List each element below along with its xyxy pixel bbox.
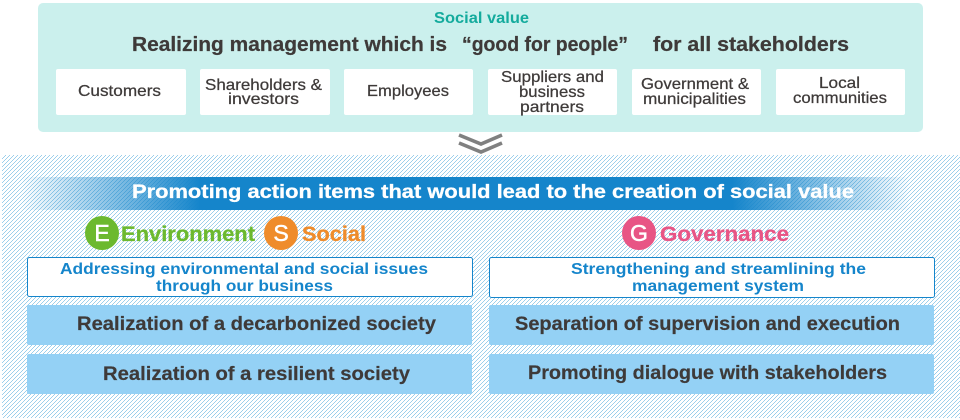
stakeholder: local communities: Local [819, 75, 860, 92]
stakeholder: government and municipalities [632, 69, 761, 115]
item: decarbonized society: Realization of a decarbonized society [77, 313, 436, 335]
item: decarbonized society [27, 305, 472, 345]
item: resilient society: Realization of a resilient society [103, 363, 410, 385]
item: resilient society [27, 354, 472, 394]
icon: G governance: G [630, 220, 648, 246]
item: separation of supervision: Separation of supervision and execution [515, 313, 900, 335]
box: addressing issues: through our business [156, 278, 333, 295]
stakeholder: employees [344, 69, 473, 115]
stakeholder: employees: Employees [367, 83, 449, 100]
banner: promoting action items [22, 177, 910, 210]
stakeholder: suppliers and business partners [488, 69, 617, 116]
item: promoting dialogue [489, 354, 934, 394]
icon: S social: S [273, 220, 289, 246]
heading: realizing management: Realizing management which is [132, 33, 447, 56]
label: social value: Social value [434, 10, 529, 27]
item: promoting dialogue: Promoting dialogue with stakeholders [528, 362, 887, 384]
heading: realizing management: for all stakeholders [653, 33, 849, 56]
arrow: double chevron [459, 135, 502, 152]
icon: G governance: Governance [660, 223, 789, 246]
panel: social value [38, 3, 923, 132]
icon: G governance [622, 216, 789, 250]
box: addressing issues: Addressing environmental and social issues [60, 261, 428, 278]
stakeholder: shareholders and investors: investors [228, 91, 299, 108]
panel: action items [2, 155, 960, 418]
icon: S social [264, 216, 366, 250]
stakeholder: suppliers and business partners: Suppliers and [501, 69, 604, 86]
icon: S social: Social [302, 223, 366, 246]
stakeholder: government and municipalities: municipalities [643, 91, 746, 108]
banner: promoting action items: Promoting action items that would lead to the creation of social value [132, 181, 854, 203]
item: separation of supervision [489, 305, 934, 345]
heading: realizing management: “good for people” [462, 33, 628, 56]
box: strengthening management [490, 258, 934, 298]
stakeholder: government and municipalities: Government & [641, 76, 749, 93]
stakeholder: shareholders and investors: Shareholders & [205, 77, 322, 94]
icon: E environment: E [94, 220, 110, 246]
stakeholder: customers [56, 69, 186, 115]
box: strengthening management: management system [632, 278, 804, 295]
stakeholder: customers: Customers [78, 83, 161, 100]
box: strengthening management: Strengthening and streamlining the [571, 261, 866, 278]
box: addressing issues [28, 258, 472, 296]
icon: E environment: Environment [121, 223, 255, 246]
icon: E environment [85, 216, 255, 250]
stakeholder: local communities [776, 69, 905, 115]
heading: realizing management [132, 33, 849, 56]
stakeholder: local communities: communities [793, 90, 887, 107]
stakeholder: shareholders and investors [200, 69, 330, 115]
stakeholder: suppliers and business partners: business [519, 84, 585, 101]
stakeholder: suppliers and business partners: partners [520, 99, 584, 116]
